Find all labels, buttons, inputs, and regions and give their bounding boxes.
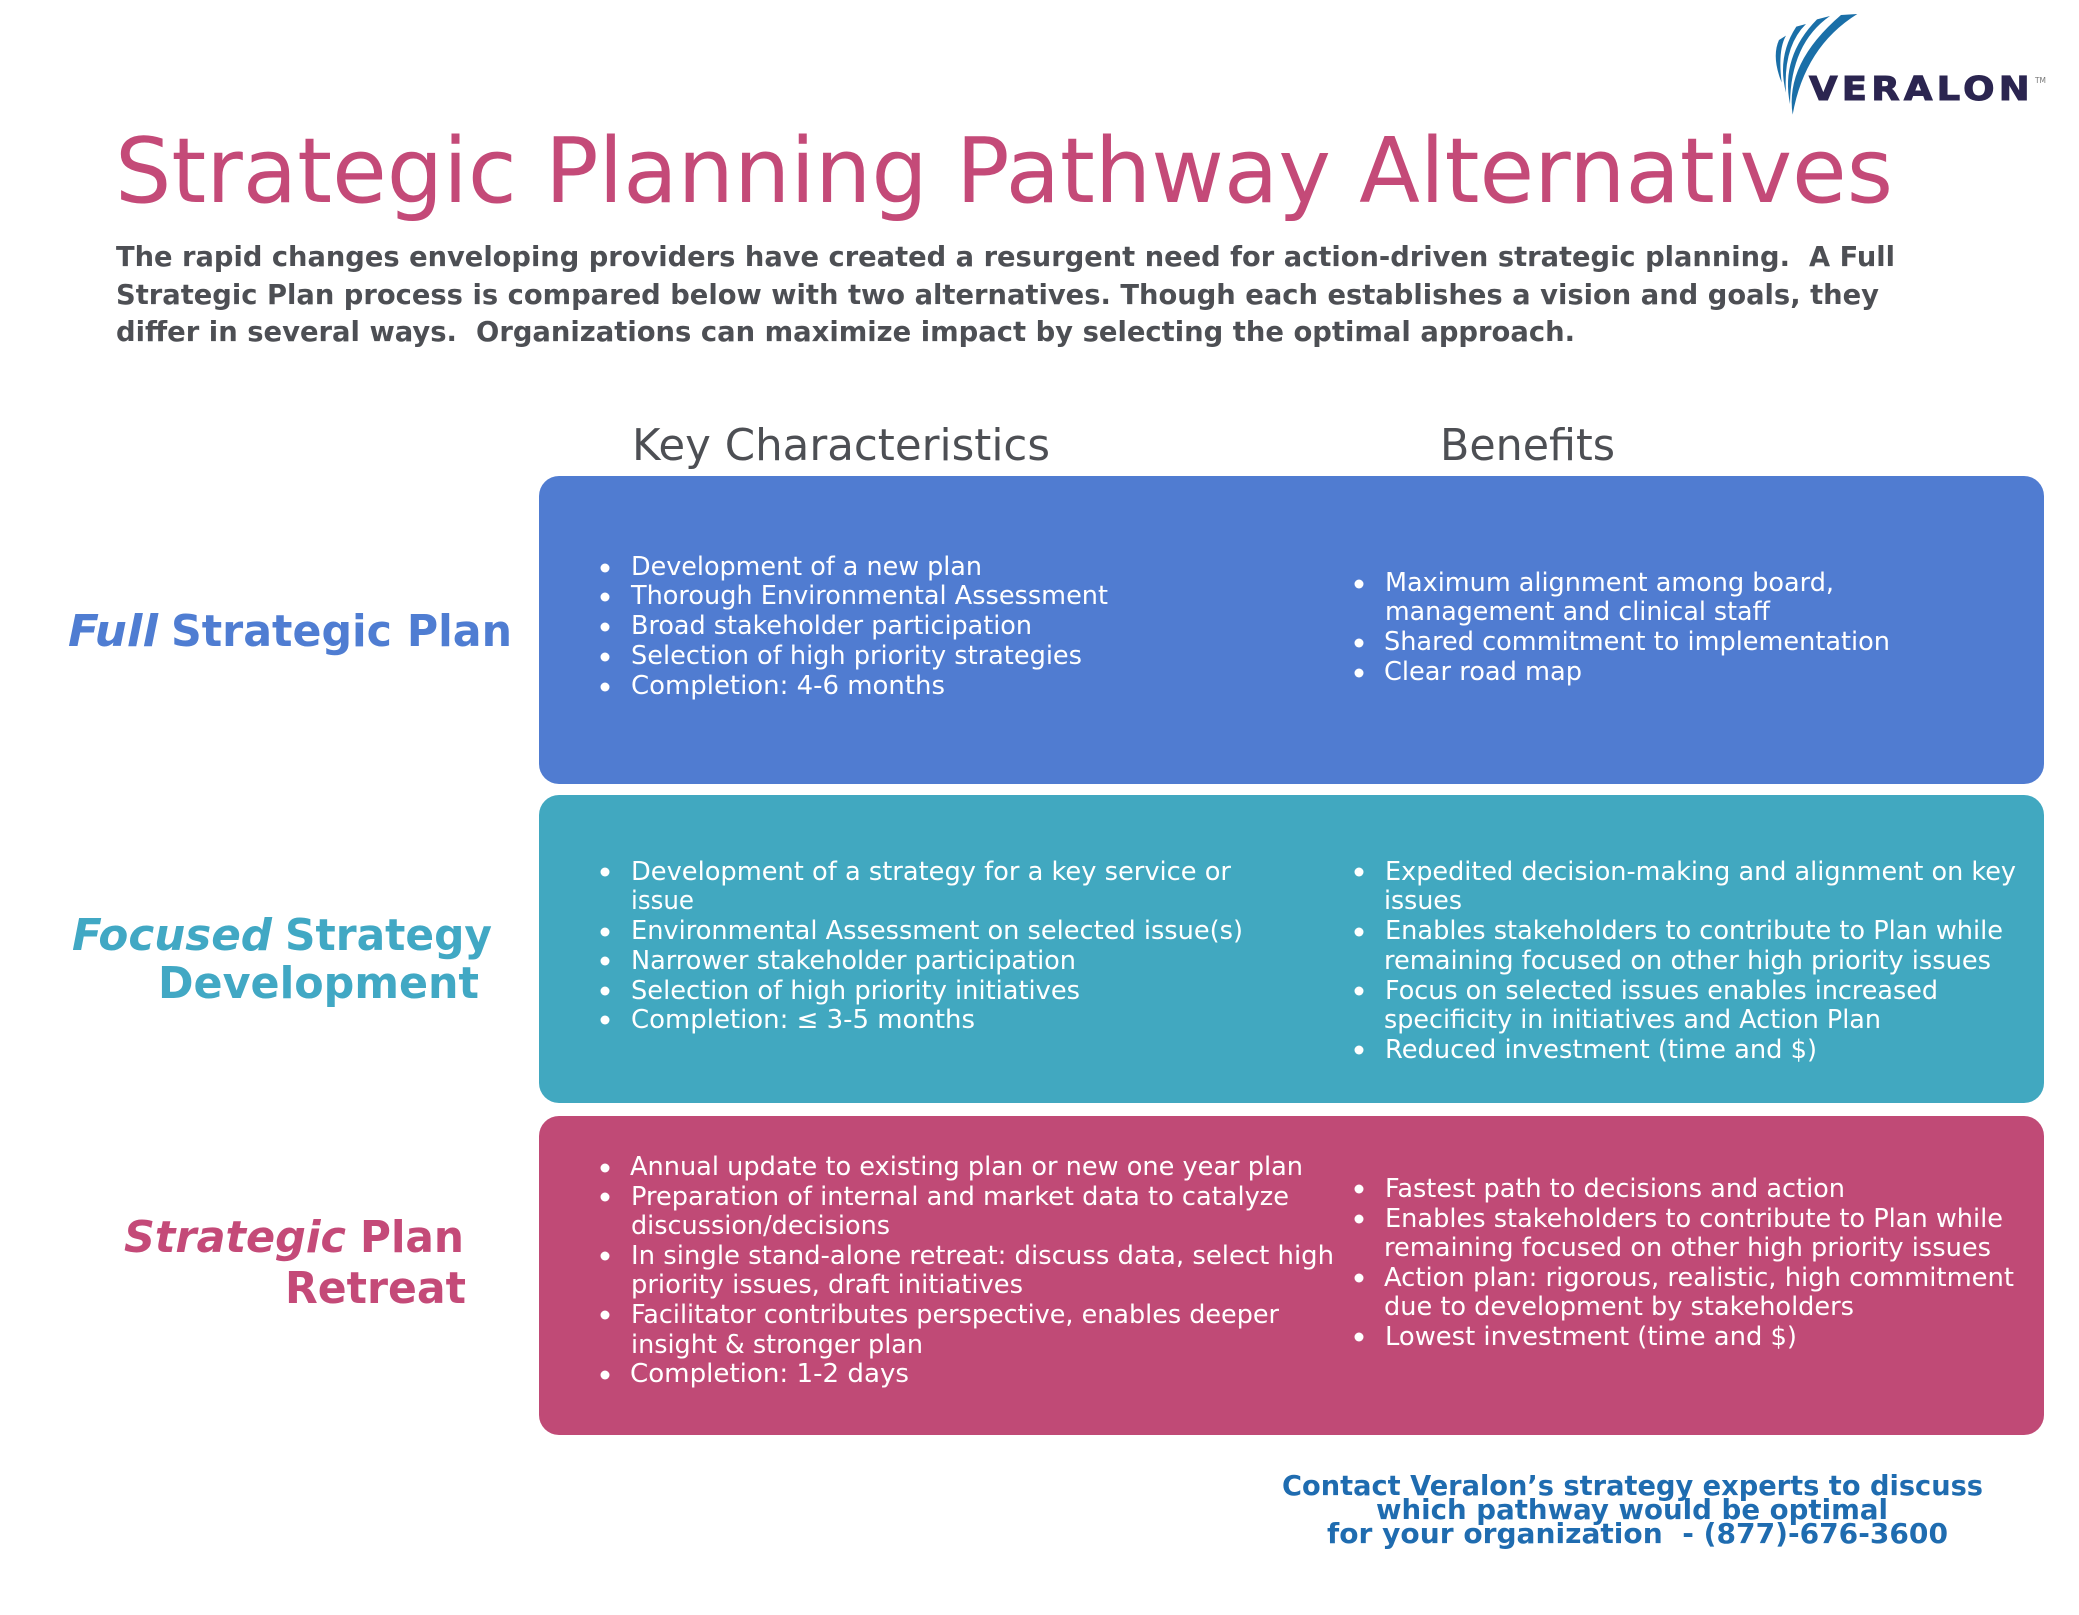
benefits list: Enables stakeholders to contribute to Plan while [1385,916,2003,946]
key characteristics list: Development of a new plan [631,552,982,582]
key characteristics list: Development of a strategy for a key service or [631,857,1231,887]
key characteristics list: Narrower stakeholder participation [631,946,1076,976]
row label: strategic plan retreat: Retreat [285,1263,466,1314]
key characteristics list: Thorough Environmental Assessment [630,581,1108,611]
row label: focused strategy development [72,910,492,1009]
contact callout: which pathway would be optimal [1376,1493,1888,1526]
benefits list: Expedited decision-making and alignment on key [1385,857,2016,887]
key characteristics list: Completion: 1-2 days [630,1359,909,1389]
benefits list: Clear road map [1384,657,1582,687]
benefits list: specificity in initiatives and Action Plan [1384,1005,1881,1035]
benefits list: issues [1384,886,1462,916]
row label: full strategic plan: Full [68,606,159,657]
row label: strategic plan retreat [124,1212,466,1314]
title: Strategic Planning Pathway Alternatives [115,119,1893,224]
column heading: key characteristics: Key Characteristics [632,420,1050,471]
benefits list: Action plan: rigorous, realistic, high commitment [1384,1263,2014,1293]
column heading: benefits: Benefits [1440,420,1615,471]
key characteristics list: Completion: ≤ 3-5 months [631,1005,975,1035]
contact callout: Contact Veralon’s strategy experts to discuss [1282,1469,1983,1502]
intro paragraph: differ in several ways. Organizations can maximize impact by selecting the optimal approach. [116,316,1575,348]
key characteristics list: priority issues, draft initiatives [631,1270,1023,1300]
row label: strategic plan retreat: Strategic [124,1212,346,1263]
benefits list: Shared commitment to implementation [1384,627,1890,657]
key characteristics list: Broad stakeholder participation [631,611,1032,641]
benefits list: Fastest path to decisions and action [1385,1174,1845,1204]
row label: focused strategy development: Focused [72,910,272,961]
benefits list: Focus on selected issues enables increased [1385,976,1938,1006]
key characteristics list: discussion/decisions [631,1211,890,1241]
benefits list [1354,857,2016,1065]
icon: logo swooshes [1776,14,1857,115]
key characteristics list: Preparation of internal and market data to catalyze [631,1182,1289,1212]
key characteristics list: Selection of high priority strategies [631,641,1082,671]
key characteristics list: Completion: 4-6 months [631,671,945,701]
contact callout: for your organization - (877)-676-3600 [1327,1517,1948,1550]
key characteristics list: insight & stronger plan [631,1330,923,1360]
benefits list: Maximum alignment among board, [1385,568,1834,598]
trademark: TM [2034,76,2046,85]
benefits list: due to development by stakeholders [1384,1292,1854,1322]
benefits list: remaining focused on other high priority issues [1384,946,1991,976]
benefits list: Lowest investment (time and $) [1385,1322,1797,1352]
key characteristics list: In single stand-alone retreat: discuss data, select high [631,1241,1334,1271]
row label: focused strategy development: Strategy [285,910,492,961]
row label: focused strategy development: Development [158,958,479,1009]
key characteristics list: issue [631,886,694,916]
key characteristics list: Selection of high priority initiatives [631,976,1080,1006]
key characteristics list: Environmental Assessment on selected issue(s) [631,916,1243,946]
intro paragraph: Strategic Plan process is compared below with two alternatives. Though each establishes a vision and goals, they [116,279,1879,311]
key characteristics list: Annual update to existing plan or new one year plan [630,1152,1303,1182]
key characteristics list [600,1152,1334,1389]
panel: strategic plan retreat [539,1116,2044,1435]
benefits list: remaining focused on other high priority issues [1384,1233,1991,1263]
row label: full strategic plan: Strategic Plan [171,606,512,657]
intro paragraph [116,241,1895,348]
panel: focused strategy development [539,795,2044,1103]
benefits list: Reduced investment (time and $) [1385,1035,1817,1065]
benefits list: Enables stakeholders to contribute to Plan while [1385,1204,2003,1234]
key characteristics list [600,552,1108,701]
key characteristics list: Facilitator contributes perspective, enables deeper [631,1300,1279,1330]
intro paragraph: The rapid changes enveloping providers have created a resurgent need for action-driven strategic planning. A Full [116,241,1895,273]
panel: full strategic plan [539,476,2044,784]
benefits list: management and clinical staff [1385,597,1771,627]
contact callout [1282,1469,1983,1550]
logo: Veralon [1776,14,2046,115]
logo wordmark: VERALON [1809,70,2030,108]
benefits list [1354,1174,2014,1352]
benefits list [1354,568,1890,687]
key characteristics list [600,857,1243,1035]
row label: strategic plan retreat: Plan [360,1212,464,1263]
